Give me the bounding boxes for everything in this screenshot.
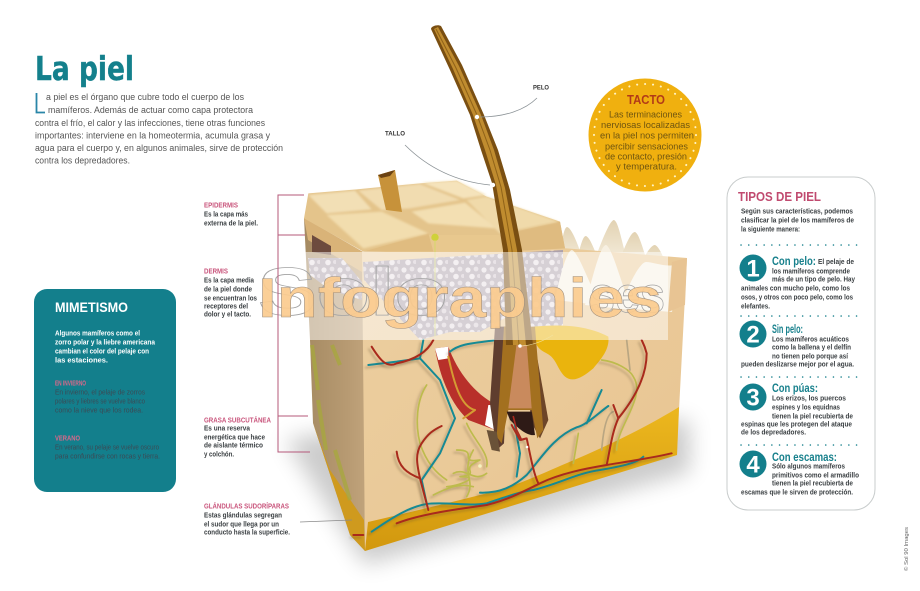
label: glandulas sudoriparas (204, 502, 290, 536)
tipo 3: con puas: 3 (746, 384, 760, 412)
intro text block: contra los depredadores. (35, 156, 130, 166)
intro text block (35, 92, 283, 166)
label: glandulas sudoriparas: conducto hasta la superficie. (204, 528, 290, 536)
intro text block: mamíferos. Además de actuar como capa protectora (48, 105, 254, 116)
tacto text: percibir sensaciones (605, 142, 688, 152)
intro text block: agua para el cuerpo y, en algunos animales, sirve de protección (35, 143, 283, 154)
tipo 1: con pelo: Con pelo: (772, 256, 816, 268)
tacto text: nerviosas localizadas (601, 120, 690, 131)
tipo 3: con puas: de los depredadores. (741, 428, 806, 436)
mimetismo intro: zorro polar y la liebre americana (55, 338, 156, 346)
label: dermis (204, 266, 257, 318)
label: epidermis (204, 200, 258, 228)
tipo 4: con escamas: escamas que le sirven de protección. (741, 488, 853, 496)
tipo 3: con puas: Los erizos, los puercos (772, 394, 846, 402)
label tallo: TALLO (385, 130, 405, 138)
tacto text: en la piel nos permiten (600, 130, 694, 142)
en invierno: polares y liebres se vuelve blanco (55, 398, 145, 406)
tipos intro: la siguiente manera: (741, 224, 800, 234)
tipo 3: con puas: tienen la piel recubierta de (772, 412, 853, 420)
label: epidermis: externa de la piel. (204, 218, 258, 228)
tipo 1: con pelo: El pelaje de (818, 257, 854, 266)
tipos intro (741, 206, 854, 234)
label: epidermis: Es la capa más (204, 210, 248, 218)
hair shaft (431, 25, 533, 345)
inner structures (353, 326, 672, 535)
en invierno: como la nieve que los rodea. (55, 408, 143, 414)
verano: En verano, su pelaje se vuelve oscuro (55, 444, 159, 452)
left face nerve streaks (312, 345, 350, 500)
tacto heading: TACTO (627, 92, 665, 107)
label: glandulas sudoriparas: el sudor que llega por un (204, 520, 279, 528)
tipo 4: con escamas (740, 450, 860, 496)
label pelo: PELO (533, 84, 549, 92)
tipos heading: TIPOS DE PIEL (738, 189, 821, 204)
tipo 2: sin pelo (740, 320, 854, 368)
veins (368, 340, 643, 532)
block shadow (285, 420, 690, 565)
watermark text: Infographies (258, 266, 662, 329)
skin block illustration (258, 25, 690, 565)
mimetismo heading: MIMETISMO (55, 300, 128, 315)
label: grasa subcutanea (204, 416, 271, 458)
label: dermis: de la piel donde (204, 284, 252, 294)
label: dermis: receptores del (204, 302, 248, 310)
intro text block: importantes: interviene en la homeotermia, acumula grasa y (35, 130, 270, 142)
tipo 1: con pelo: más de un tipo de pelo. Hay (772, 274, 855, 284)
mimetismo intro: cambian el color del pelaje con (55, 346, 149, 356)
verano: para confundirse con rocas y tierra. (55, 454, 160, 460)
tipo 4: con escamas: primitivos como el armadillo (772, 470, 860, 480)
tipo 1: con pelo: osos, y otros con poco pelo, como los (741, 292, 853, 302)
drop cap L (36, 93, 45, 112)
en invierno (55, 378, 145, 414)
tipo 4: con escamas: tienen la piel recubierta de (772, 478, 853, 488)
label: grasa subcutanea: de aislante térmico (204, 440, 264, 450)
arrector muscle (435, 347, 497, 430)
watermark text (258, 254, 665, 330)
tipo 1: con pelo: animales con mucho pelo, como los (741, 284, 850, 292)
tacto text: de contacto, presión (605, 152, 687, 162)
tipo 4: con escamas: 4 (746, 452, 760, 478)
dermis cells (363, 250, 563, 350)
label: dermis: dolor y el tacto. (204, 310, 251, 318)
sebaceous gland (533, 326, 609, 379)
tipo 2: sin pelo: 2 (746, 322, 760, 348)
tipo 3: con puas: Con púas: (772, 383, 818, 395)
label: dermis: DERMIS (204, 266, 228, 276)
tipo 3: con puas: espinas que les protegen del ataque (741, 420, 852, 428)
follicle sheath (490, 327, 509, 450)
tipos intro: Según sus características, podemos (741, 206, 853, 216)
panel: tipos de piel (727, 177, 875, 510)
watermark text: Solo (258, 254, 448, 330)
en invierno: En invierno, el pelaje de zorros (55, 390, 145, 396)
mimetismo intro: Algunos mamíferos como el (55, 328, 140, 338)
brackets (278, 195, 310, 452)
label: dermis: Es la capa media (204, 276, 255, 284)
spikes back row (558, 220, 670, 272)
tipo 2: sin pelo: no tienen pelo porque así (772, 352, 849, 360)
tacto text: y temperatura. (616, 162, 677, 172)
tipo 1: con pelo: 1 (746, 256, 760, 282)
intro text block: contra el frío, el calor y las infecciones, tiene otras funciones (35, 118, 265, 129)
tacto text (600, 110, 694, 172)
tipo 2: sin pelo: Sin pelo: (772, 324, 803, 336)
spikes front row (555, 245, 680, 312)
tacto text: Las terminaciones (609, 110, 682, 120)
label: dermis: se encuentran los (204, 294, 257, 302)
left face (304, 218, 365, 551)
label: grasa subcutanea: Es una reserva (204, 424, 251, 432)
tipo 4: con escamas: Sólo algunos mamíferos (772, 462, 845, 470)
mimetismo intro (55, 328, 156, 364)
label: epidermis: EPIDERMIS (204, 200, 238, 210)
label: glandulas sudoriparas: GLÁNDULAS SUDORÍPARAS (204, 502, 289, 510)
tipo 3: con puas: espines y los equidnas (772, 402, 840, 412)
tipo 4: con escamas: Con escamas: (772, 452, 837, 464)
label: grasa subcutanea: GRASA SUBCUTÁNEA (204, 416, 271, 424)
tipo 2: sin pelo: Los mamíferos acuáticos (772, 334, 849, 344)
tipo 2: sin pelo: como la ballena y el delfín (772, 342, 851, 352)
watermark band (304, 252, 668, 340)
front face (362, 248, 687, 551)
title: La piel (35, 49, 134, 88)
tipo 1: con pelo (740, 254, 855, 310)
watermark text: ses (590, 267, 665, 323)
tipo 3: con puas (740, 383, 853, 436)
verano (55, 434, 160, 460)
panel: tacto (588, 78, 702, 192)
mimetismo intro: las estaciones. (55, 356, 108, 364)
stub hair (378, 170, 402, 212)
credit: © Sol 90 Images (903, 526, 910, 571)
label: glandulas sudoriparas: Estas glándulas segregan (204, 510, 282, 520)
arteries (353, 340, 672, 535)
label: grasa subcutanea: energética que hace (204, 432, 265, 442)
tipo 1: con pelo: los mamíferos comprende (772, 266, 850, 276)
tipos intro: clasificar la piel de los mamíferos de (741, 216, 854, 224)
fat layer (365, 407, 679, 551)
follicle (497, 327, 543, 443)
en invierno: EN INVIERNO (55, 378, 86, 388)
nerve fibres (417, 360, 637, 497)
intro text block: a piel es el órgano que cubre todo el cuerpo de los (46, 92, 244, 103)
tipo 1: con pelo: elefantes. (741, 302, 770, 310)
nerve ending (431, 234, 439, 241)
label: grasa subcutanea: y colchón. (204, 450, 234, 458)
verano: VERANO (55, 434, 80, 442)
top surface (304, 181, 565, 337)
gland leader (300, 520, 352, 522)
tipo 2: sin pelo: pueden deslizarse mejor por el agua. (741, 360, 854, 368)
panel: mimetismo (34, 289, 176, 492)
labels: pelo and tallo (385, 84, 553, 468)
